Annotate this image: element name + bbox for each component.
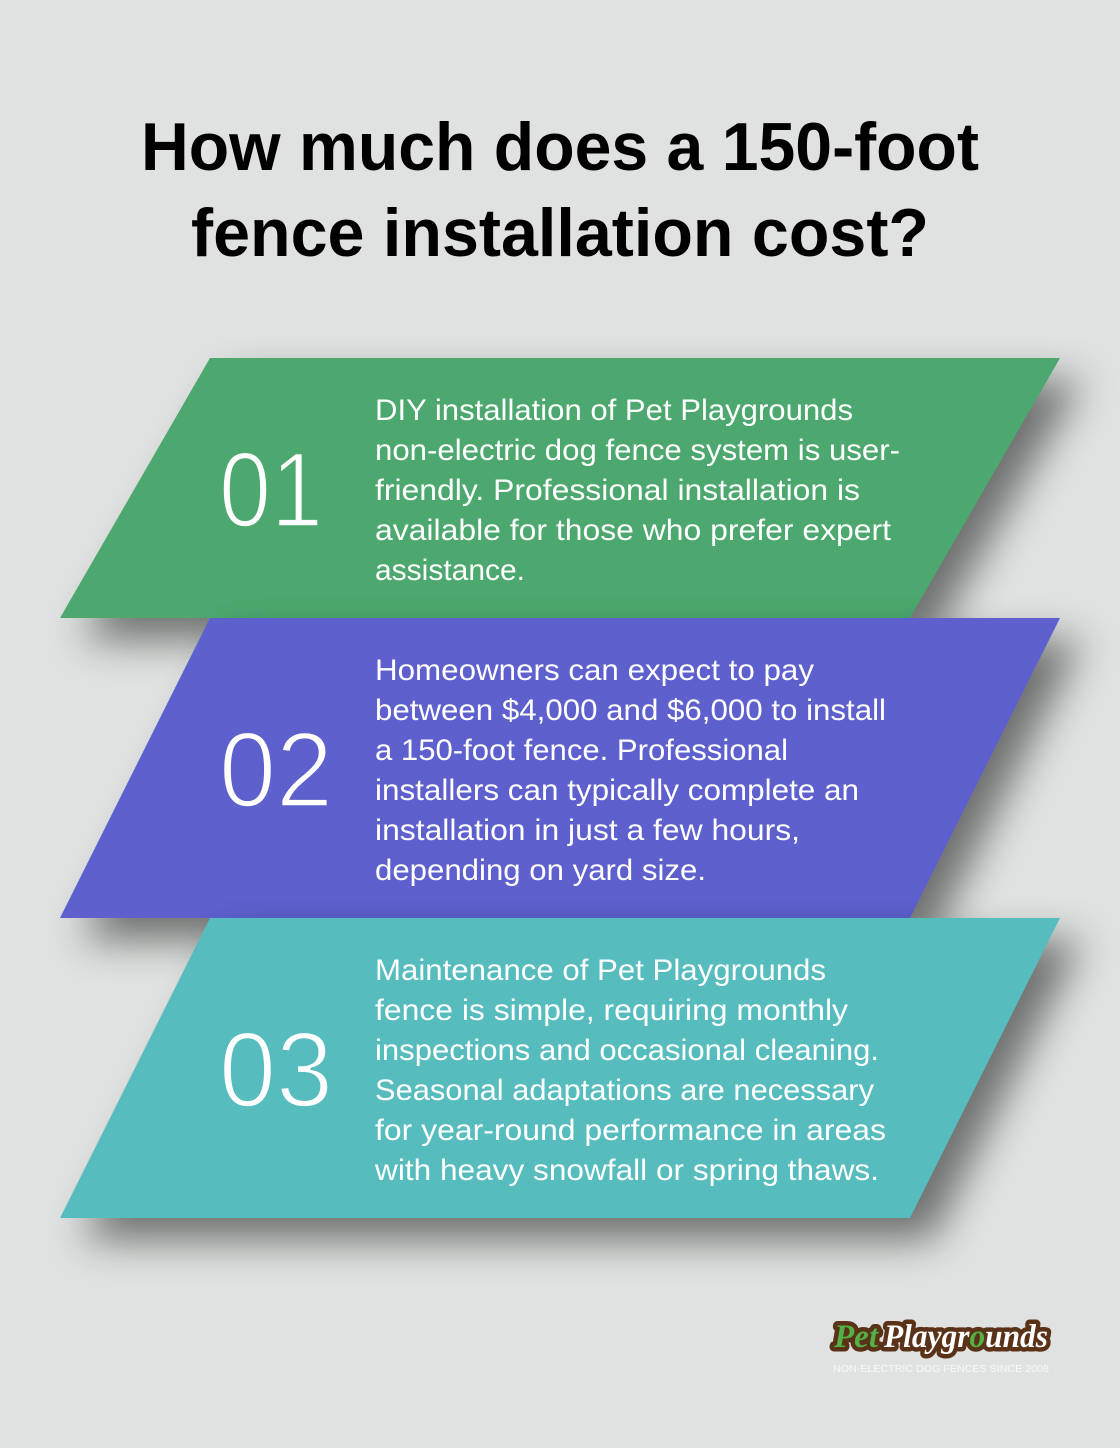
number 03: 03 [219, 1010, 333, 1130]
text: step 03 description: Seasonal adaptations are necessary [375, 1074, 874, 1107]
panel: step 01 [60, 358, 1082, 640]
text: step 02 description: installation in just a few hours, [375, 814, 800, 847]
panel: step 02 [60, 618, 1082, 940]
logo tagline: NON-ELECTRIC DOG FENCES SINCE 2008 [833, 1363, 1049, 1375]
logo: Pet Playgrounds [833, 1319, 1049, 1375]
text: step 03 description: for year-round performance in areas [375, 1114, 886, 1147]
text: step 03 description: Maintenance of Pet Playgrounds [375, 954, 826, 987]
number 01: 01 [219, 430, 323, 550]
text: step 03 description: with heavy snowfall or spring thaws. [374, 1154, 879, 1187]
text: step 01 description: assistance. [375, 554, 525, 587]
text: step 02 description: between $4,000 and $6,000 to install [375, 694, 886, 727]
text: step 01 description: DIY installation of Pet Playgrounds [375, 394, 853, 427]
title: fence installation cost? [191, 195, 929, 271]
number 02: 02 [219, 710, 333, 830]
text: step 01 description: available for those who prefer expert [375, 514, 892, 547]
title: How much does a 150-foot [141, 109, 979, 185]
text: step 01 description: friendly. Professional installation is [375, 474, 860, 507]
title [141, 109, 979, 271]
logo: Pet Playgrounds: Playgrounds [883, 1319, 1048, 1355]
text: step 02 description: Homeowners can expect to pay [375, 654, 814, 687]
text: step 03 description: fence is simple, requiring monthly [375, 994, 848, 1027]
panel: step 03 [60, 918, 1082, 1240]
logo: Pet Playgrounds: Playgrounds [883, 1319, 1048, 1355]
text: step 02 description: installers can typically complete an [375, 774, 859, 807]
text: step 01 description: non-electric dog fence system is user- [375, 434, 900, 467]
text: step 02 description: depending on yard size. [375, 854, 706, 887]
text: step 03 description [374, 954, 886, 1187]
text: step 01 description [375, 394, 900, 587]
text: step 02 description [375, 654, 886, 887]
logo: Pet Playgrounds: Pet [833, 1319, 879, 1355]
text: step 02 description: a 150-foot fence. Professional [375, 734, 788, 767]
logo: Pet Playgrounds: Pet [833, 1319, 879, 1355]
text: step 03 description: inspections and occasional cleaning. [375, 1034, 879, 1067]
